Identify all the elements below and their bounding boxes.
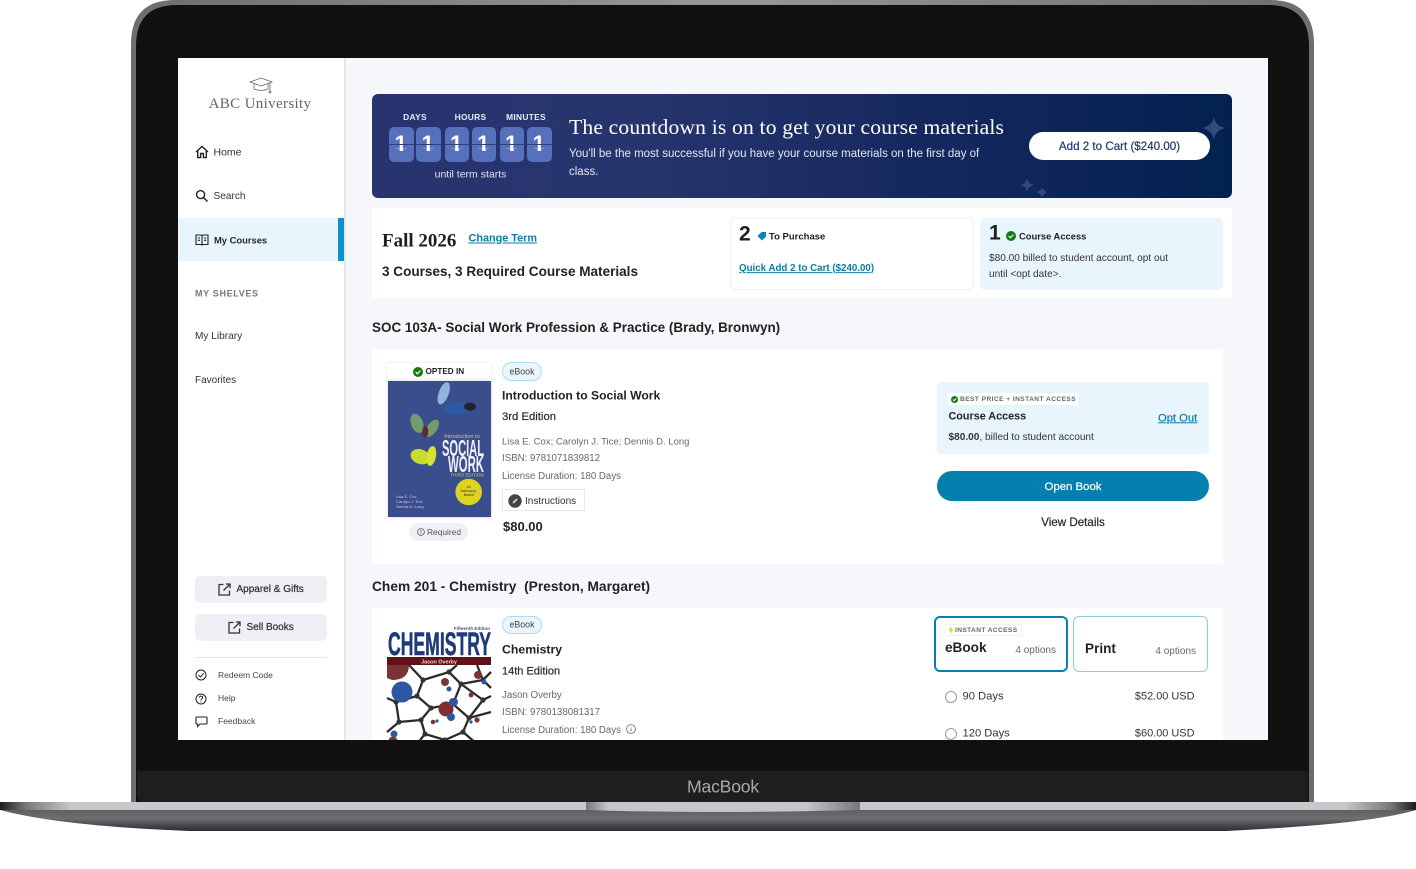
ebook pill: eBook bbox=[510, 620, 534, 630]
option: 120 days: 120 Days bbox=[962, 727, 1010, 739]
banner text: class. bbox=[569, 166, 598, 178]
banner text bbox=[569, 148, 980, 178]
book cover: chemistry: Fifteenth Edition bbox=[454, 626, 490, 631]
edition: 3rd Edition bbox=[502, 411, 556, 423]
countdown digits: 1 bbox=[533, 131, 545, 156]
cover text: Introduction to bbox=[444, 434, 480, 440]
required pill: Required bbox=[427, 527, 461, 537]
instant access tag: INSTANT ACCESS bbox=[955, 627, 1017, 634]
tab: print: 4 options bbox=[1155, 646, 1196, 656]
to purchase card: Quick Add 2 to Cart ($240.00) bbox=[739, 263, 874, 274]
book cover: chemistry bbox=[386, 626, 492, 740]
open book button bbox=[937, 471, 1209, 501]
edition: 14th Edition bbox=[502, 665, 560, 677]
countdown digits bbox=[389, 127, 552, 162]
countdown labels: DAYS bbox=[403, 112, 427, 122]
book metadata: Lisa E. Cox; Carolyn J. Tice; Dennis D. Long bbox=[502, 436, 689, 447]
course access card: Course Access bbox=[1019, 230, 1086, 241]
course access panel: $80.00, billed to student account bbox=[948, 431, 1094, 442]
link: feedback bbox=[195, 716, 256, 728]
panel: chemistry course card bbox=[372, 608, 1223, 748]
to purchase card: 2 bbox=[739, 222, 751, 245]
app screen bbox=[178, 58, 1268, 740]
ebook pill bbox=[502, 362, 542, 381]
countdown labels: MINUTES bbox=[506, 112, 546, 122]
ebook pill: eBook bbox=[510, 366, 534, 376]
link: redeem code: Redeem Code bbox=[218, 669, 273, 679]
add to cart button: Add 2 to Cart ($240.00) bbox=[1059, 140, 1180, 153]
book cover: social work: Advocacy- bbox=[461, 489, 478, 493]
course access panel bbox=[937, 382, 1209, 454]
banner heading: The countdown is on to get your course materials bbox=[569, 115, 1004, 139]
book cover: social work: Lisa E. Cox bbox=[396, 494, 416, 499]
ebook pill bbox=[502, 616, 542, 634]
book metadata: License Duration: 180 Days bbox=[502, 471, 621, 482]
tab: print bbox=[1073, 616, 1208, 672]
courses count: 3 Courses, 3 Required Course Materials bbox=[382, 263, 638, 278]
button: apparel and gifts bbox=[195, 576, 327, 603]
logo wordmark: ABC University bbox=[209, 96, 311, 112]
book cover: social work bbox=[388, 381, 491, 517]
nav: search bbox=[196, 190, 245, 202]
book metadata: Jason Overby bbox=[502, 690, 562, 701]
term title: Fall 2026 bbox=[382, 231, 456, 252]
link: help bbox=[196, 693, 236, 704]
nav: my library: My Library bbox=[195, 331, 242, 342]
book cover: social work: Carolyn J. Tice bbox=[396, 499, 423, 504]
heading: SOC 103A: SOC 103A- Social Work Profession & Practice (Brady, Bronwyn) bbox=[372, 319, 780, 334]
link: feedback: Feedback bbox=[218, 716, 255, 726]
book metadata: ISBN: 9781071839812 bbox=[502, 453, 600, 464]
book cover: chemistry: Jason Overby bbox=[421, 660, 457, 666]
nav: home: Home bbox=[214, 146, 242, 158]
countdown labels bbox=[403, 112, 546, 122]
button: sell books bbox=[195, 614, 327, 641]
view details link: View Details bbox=[1041, 516, 1105, 529]
panel: countdown banner bbox=[372, 94, 1232, 198]
instructions button: Instructions bbox=[525, 496, 576, 507]
book cover: social work: An bbox=[467, 485, 471, 489]
link: help: Help bbox=[218, 693, 235, 703]
nav: favorites: Favorites bbox=[195, 375, 236, 386]
nav: search: Search bbox=[214, 191, 245, 202]
required pill bbox=[409, 523, 468, 541]
course access panel: Course Access bbox=[948, 410, 1026, 422]
link: redeem code bbox=[196, 669, 273, 680]
panel: sidebar bbox=[178, 58, 346, 740]
instructions button bbox=[502, 489, 585, 511]
open book button: Open Book bbox=[1044, 481, 1102, 493]
MacBook wordmark: MacBook bbox=[687, 776, 759, 796]
icon: price tag bbox=[758, 232, 766, 240]
tab: ebook selected: eBook bbox=[945, 640, 987, 655]
price: $80.00 bbox=[503, 519, 543, 534]
course access panel: BEST PRICE + INSTANT ACCESS bbox=[960, 396, 1076, 403]
countdown labels: HOURS bbox=[455, 112, 486, 122]
panel: social work course card bbox=[372, 349, 1223, 564]
tab: ebook selected: 4 options bbox=[1015, 645, 1056, 656]
course access card: until <opt date>. bbox=[989, 269, 1061, 280]
option: 120 days: $60.00 USD bbox=[1135, 727, 1194, 739]
countdown digits: 1 bbox=[477, 131, 489, 156]
until term starts: until term starts bbox=[435, 168, 506, 180]
decorative stars bbox=[1020, 118, 1226, 198]
countdown digits: 1 bbox=[450, 131, 462, 156]
book metadata bbox=[502, 690, 636, 736]
book metadata bbox=[502, 436, 689, 482]
nav: home bbox=[196, 146, 242, 158]
countdown digits: 1 bbox=[422, 131, 434, 156]
to purchase card bbox=[730, 218, 974, 290]
add to cart button bbox=[1029, 132, 1210, 160]
shelves heading: MY SHELVES bbox=[195, 288, 259, 298]
book title: Introduction to Social Work bbox=[502, 388, 660, 402]
book cover: social work: SOCIAL bbox=[442, 435, 484, 461]
button: apparel and gifts: Apparel & Gifts bbox=[236, 584, 304, 595]
opted in header: OPTED IN bbox=[426, 367, 464, 376]
panel: term summary bbox=[372, 208, 1232, 298]
tab: print: Print bbox=[1085, 640, 1116, 655]
course access card bbox=[980, 218, 1223, 290]
course access panel: Opt Out bbox=[1158, 412, 1197, 424]
book cover: social work: Based bbox=[464, 493, 474, 497]
book cover: social work: WORK bbox=[448, 451, 484, 477]
countdown digits: 1 bbox=[395, 131, 407, 156]
book metadata: License Duration: 180 Days bbox=[502, 725, 621, 736]
heading: Chem 201: Chem 201 - Chemistry (Preston, Margaret) bbox=[372, 578, 650, 593]
book cover: chemistry: CHEMISTRY bbox=[388, 626, 491, 662]
option: 120 days bbox=[945, 727, 1194, 740]
book cover: social work: Dennis D. Long bbox=[396, 504, 424, 509]
tab: ebook selected bbox=[934, 616, 1068, 672]
to purchase card: To Purchase bbox=[769, 231, 825, 242]
opted in header bbox=[387, 363, 491, 381]
button: sell books: Sell Books bbox=[246, 622, 294, 633]
course access card: 1 bbox=[989, 221, 1001, 244]
nav: my courses (active): My Courses bbox=[214, 234, 267, 245]
book cover: social work: THIRD EDITION bbox=[450, 472, 484, 478]
icon: green check bbox=[1006, 231, 1016, 241]
instant access tag bbox=[944, 624, 1022, 636]
icon: graduation cap logo bbox=[249, 78, 273, 94]
countdown digits: 1 bbox=[505, 131, 517, 156]
change term link: Change Term bbox=[468, 232, 537, 244]
option: 90 days: 90 Days bbox=[962, 690, 1004, 702]
banner text: You'll be the most successful if you have your course materials on the first day of bbox=[569, 148, 979, 160]
book metadata: ISBN: 9780138081317 bbox=[502, 707, 600, 718]
book title: Chemistry bbox=[502, 642, 562, 656]
course access card: $80.00 billed to student account, opt out bbox=[989, 252, 1168, 263]
option: 90 days: $52.00 USD bbox=[1135, 690, 1194, 702]
butterflies bbox=[408, 381, 476, 467]
nav: my courses (active) bbox=[178, 218, 344, 261]
option: 90 days bbox=[945, 690, 1194, 703]
